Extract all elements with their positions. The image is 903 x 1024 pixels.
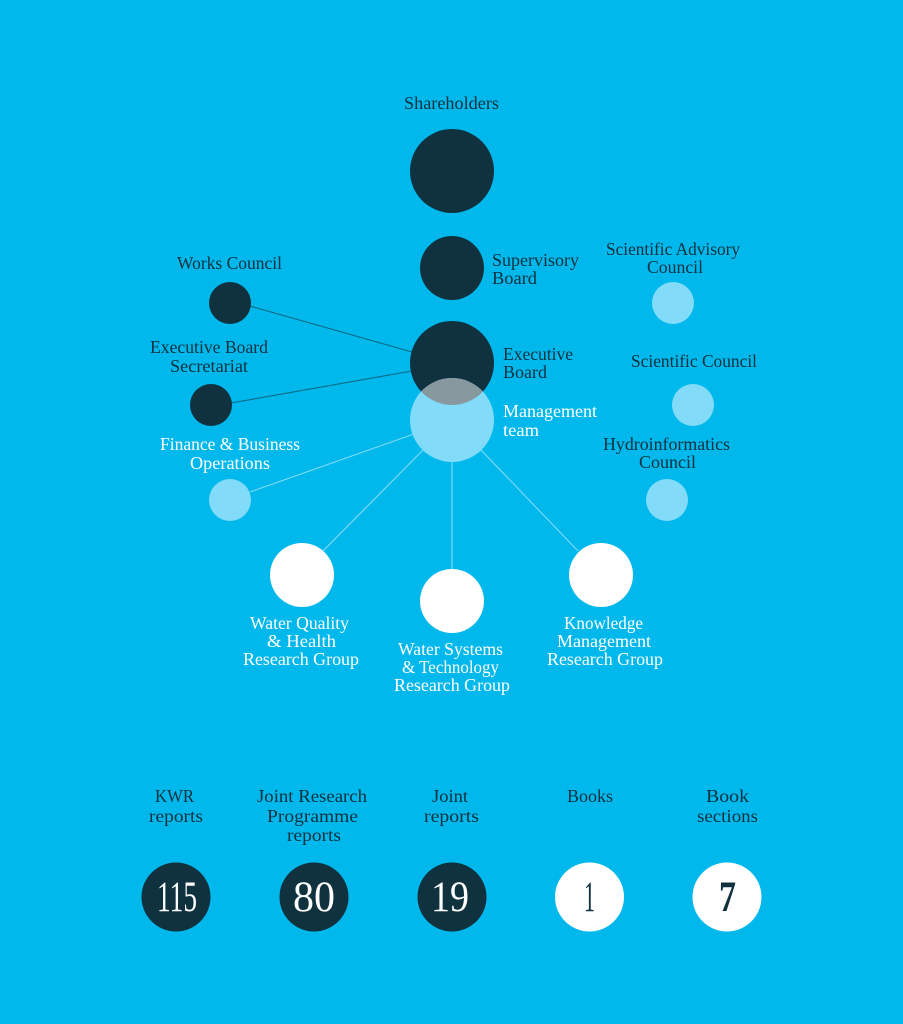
stat: Books 1: Books [567,786,613,806]
node: Executive Board: Executive [503,344,573,364]
node: Hydroinformatics Council [603,434,730,521]
stat: Joint reports 19: Joint [432,786,468,806]
node: Works Council: Works Council [177,253,282,273]
node: Water Systems & Technology Research Group: Water Systems [398,639,503,659]
node: Water Systems & Technology Research Group: & Technology [402,657,499,677]
node: Knowledge Management Research Group [547,543,663,669]
node: Scientific Advisory Council: Council [647,257,703,277]
stat: Book sections 7: Book [706,786,749,806]
node: Water Systems & Technology Research Group: Research Group [394,675,510,695]
node: Water Quality & Health Research Group: Water Quality [250,613,349,633]
stat: Joint Research Programme reports 80: Programme [267,806,358,826]
node: Knowledge Management Research Group: Research Group [547,649,663,669]
node: Finance & Business Operations: Operations [190,453,270,473]
node: Scientific Council [631,351,757,426]
node: Works Council [177,253,282,324]
node: Scientific Advisory Council: Scientific Advisory [606,239,740,259]
node: Hydroinformatics Council: Hydroinformatics [603,434,730,454]
stat: Joint Research Programme reports 80 [257,786,367,932]
node: Finance & Business Operations [160,434,300,521]
node: Executive Board [410,321,573,405]
stat: KWR reports 115: KWR [155,786,194,806]
node: Executive Board: Board [503,362,547,382]
stat: Book sections 7 [692,786,762,932]
node: Water Systems & Technology Research Group [394,569,510,695]
stat: Joint Research Programme reports 80: reports [287,825,341,845]
node: Executive Board Secretariat: Secretariat [170,356,248,376]
stat: Joint Research Programme reports 80: 80 [293,874,335,921]
connector lines: light [250,434,578,570]
connector lines: dark [231,306,412,403]
stat: Joint reports 19: 19 [431,874,469,921]
node: Supervisory Board [420,236,579,300]
node: Water Quality & Health Research Group: Research Group [243,649,359,669]
node: Scientific Council: Scientific Council [631,351,757,371]
node: Supervisory Board: Supervisory [492,250,579,270]
node: Knowledge Management Research Group: Management [557,631,651,651]
node: Knowledge Management Research Group: Knowledge [564,613,643,633]
node: Water Quality & Health Research Group: & Health [267,631,336,651]
node: Water Quality & Health Research Group [243,543,359,669]
stat: Book sections 7: 7 [719,874,736,921]
node: Management team [410,378,597,462]
node: Management team: Management [503,401,597,421]
stat: Joint Research Programme reports 80: Joint Research [257,786,367,806]
node: Executive Board Secretariat [150,337,268,426]
stat: Joint reports 19: reports [424,806,479,826]
node: Executive Board Secretariat: Executive Board [150,337,268,357]
node: Scientific Advisory Council [606,239,740,324]
stat: Book sections 7: sections [697,806,758,826]
node: Shareholders [404,93,499,213]
stat: Books 1: 1 [584,874,595,921]
stat: KWR reports 115: reports [149,806,203,826]
stat: KWR reports 115: 115 [157,874,197,921]
node: Supervisory Board: Board [492,268,537,288]
node: Management team: team [503,420,539,440]
node: Finance & Business Operations: Finance & Business [160,434,300,454]
stat: KWR reports 115 [142,786,210,932]
stat: Joint reports 19 [418,786,486,932]
node: Shareholders: Shareholders [404,93,499,113]
node: Hydroinformatics Council: Council [639,452,696,472]
stat: Books 1 [555,786,624,932]
